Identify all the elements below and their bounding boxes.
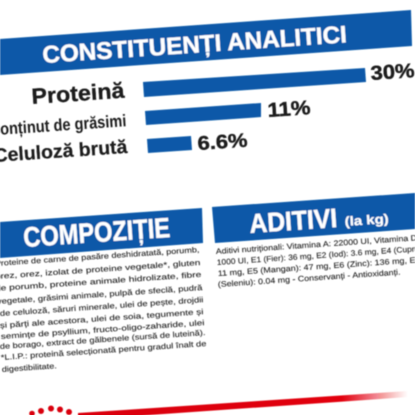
bar: proteina [143, 68, 366, 97]
panel: constituenti analitici [0, 10, 415, 167]
heading band: constituenti [0, 10, 412, 75]
text block: compozitie [0, 245, 207, 374]
text block: compozitie: vegetale, grăsimi animale, pulpă de sfeclă, pudră [0, 283, 204, 306]
footer: logo and red line [29, 391, 408, 415]
value: 6.6%: 6.6% [197, 130, 248, 155]
label: proteina: Proteină [31, 78, 126, 109]
heading: aditivi: ADITIVI [248, 203, 338, 239]
panel: aditivi [212, 193, 415, 289]
heading: compozitie: COMPOZIȚIE [22, 212, 171, 253]
text block: aditivi: 1000 UI, E1 (Fier): 36 mg, E2 (Iod): 3.6 mg, E4 (Cupru): [217, 244, 415, 267]
icon: crown dots logo [29, 406, 72, 415]
row: celuloza bruta [0, 130, 248, 167]
text block: compozitie: *L.I.P.: proteină selecționată pentru gradul înalt de [1, 339, 207, 362]
red line [78, 391, 408, 415]
row: proteina [31, 60, 415, 109]
bar: celuloza bruta [147, 136, 192, 153]
heading band: aditivi [212, 193, 415, 243]
heading: constituenti analitici: CONSTITUENȚI ANALITICI [42, 21, 348, 69]
row: continut de grasimi [0, 97, 311, 139]
text block: aditivi [216, 233, 415, 289]
text block: compozitie: de borago, extract de gălbenele (sursă de luteină). [0, 328, 206, 351]
panel: compozitie [0, 208, 207, 374]
text block: compozitie: de celuloză, săruri minerale, ulei de pește, drojdii [0, 295, 204, 318]
text block: compozitie: semințe de psyllium, fructo-oligo-zaharide, ulei [1, 318, 205, 341]
heading unit: la kg: (la kg) [344, 211, 389, 229]
text block: compozitie: digestibilitate. [2, 361, 57, 374]
text block: aditivi: 11 mg, E5 (Mangan): 47 mg, E6 (Zinc): 136 mg, E8 [218, 255, 415, 278]
text block: compozitie: și părți ale acestora, ulei de soia, tegumente și [0, 307, 204, 330]
value: 30%: 30% [370, 60, 415, 85]
bar: continut de grasimi [145, 103, 261, 125]
text block: aditivi: (Seleniu): 0.04 mg - Conservanți - Antioxidanți. [218, 268, 401, 289]
value: 11%: 11% [267, 97, 311, 122]
heading band: compozitie [0, 208, 203, 258]
text block: aditivi: Aditivi nutriționali: Vitamina A: 22000 UI, Vitamina D3: [216, 233, 415, 256]
